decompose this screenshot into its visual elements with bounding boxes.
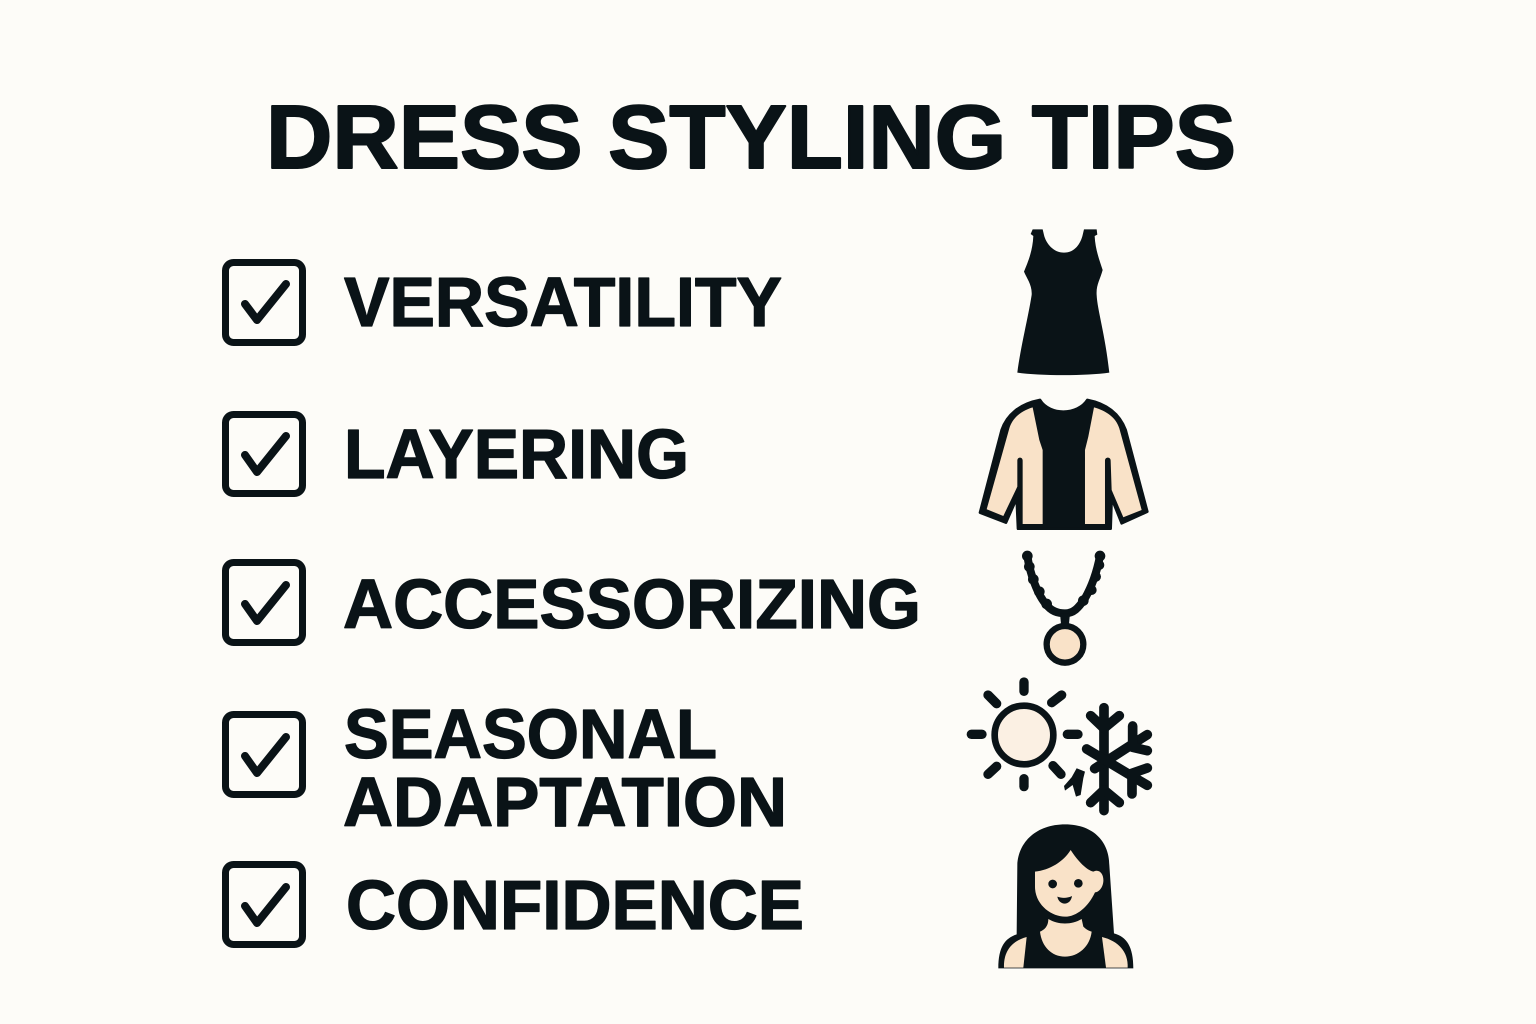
icon: dress	[1017, 229, 1109, 375]
row: layering	[226, 414, 689, 494]
icon: jacket	[980, 400, 1147, 529]
face	[1035, 850, 1103, 917]
row: confidence	[226, 864, 804, 944]
row: seasonal adaptation	[226, 695, 787, 841]
label: seasonal adaptation: SEASONAL	[344, 695, 717, 773]
hair and outline	[998, 824, 1133, 968]
row: accessorizing	[226, 562, 921, 643]
checkbox: seasonal adaptation	[226, 714, 302, 794]
icon: sun	[971, 682, 1078, 787]
label: seasonal adaptation: ADAPTATION	[343, 763, 787, 841]
label: versatility: VERSATILITY	[344, 263, 782, 341]
checkbox: versatility	[226, 262, 302, 342]
icon: necklace	[1022, 551, 1105, 663]
eyes and smile	[1048, 879, 1083, 904]
label: layering: LAYERING	[344, 415, 689, 493]
checkbox: confidence	[226, 864, 302, 944]
icon: snowflake	[1064, 708, 1147, 811]
jacket right panel	[1085, 407, 1142, 524]
icon: woman	[998, 824, 1133, 968]
jacket left panel	[987, 407, 1043, 524]
title: DRESS STYLING TIPS	[266, 88, 1236, 188]
label: confidence: CONFIDENCE	[346, 866, 804, 944]
neck and chest	[1040, 919, 1092, 957]
left shoulder	[1004, 937, 1027, 968]
row: versatility	[226, 262, 782, 342]
right shoulder	[1102, 937, 1128, 968]
checkbox: layering	[226, 414, 302, 494]
label: seasonal adaptation	[343, 695, 787, 841]
checkbox: accessorizing	[226, 562, 302, 642]
label: accessorizing: ACCESSORIZING	[343, 565, 921, 643]
